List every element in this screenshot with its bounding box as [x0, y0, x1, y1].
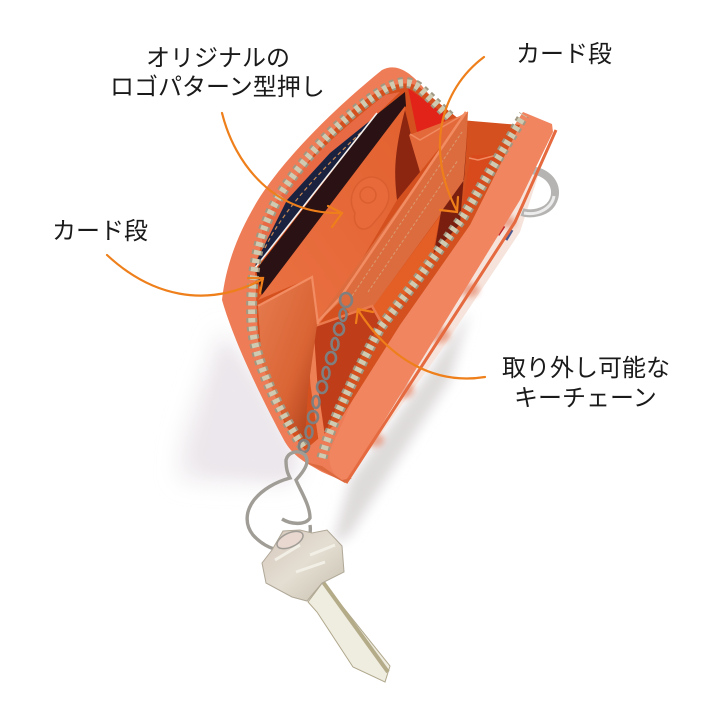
left zipper [252, 83, 451, 447]
right zipper tape [329, 112, 553, 482]
key hook [247, 452, 310, 551]
center front pocket [311, 306, 381, 440]
tape sliver inside [262, 92, 400, 260]
dark fold [395, 110, 420, 200]
key [262, 528, 390, 682]
ring hardware [522, 170, 555, 214]
callout arrow: key chain [356, 309, 485, 378]
interior [255, 84, 520, 450]
wallet [222, 67, 556, 484]
callout arrow: logo pattern [222, 113, 342, 227]
right zipper [322, 115, 524, 458]
navy card [255, 92, 405, 268]
center orange floor [367, 216, 440, 322]
label: removable key chain [502, 355, 670, 412]
logo panel [258, 106, 420, 330]
red lining [408, 88, 450, 137]
label: logo pattern: オリジナルの [146, 45, 290, 72]
chain [299, 293, 352, 452]
label: logo pattern: ロゴパターン型押し [110, 74, 325, 101]
cast shadow [180, 310, 470, 545]
label: removable key chain: キーチェーン [514, 385, 657, 412]
label: removable key chain: 取り外し可能な [502, 355, 670, 382]
rear pocket [409, 113, 468, 172]
outer body [222, 67, 455, 482]
stitched panel [313, 112, 468, 327]
back panel with logo pattern [340, 170, 540, 484]
left front flap [258, 277, 317, 440]
callout arrow: left card slot [107, 255, 263, 296]
card slot [256, 92, 406, 296]
label: card slot upper right: カード段 [516, 41, 612, 68]
label: card slot left: カード段 [52, 218, 148, 245]
callout arrow: upper card slot [440, 57, 484, 212]
embossed logo [351, 177, 389, 229]
label: logo pattern [110, 45, 325, 101]
dark shade [434, 125, 468, 253]
right pocket [460, 155, 498, 226]
bottom tip of wallet [305, 462, 352, 483]
